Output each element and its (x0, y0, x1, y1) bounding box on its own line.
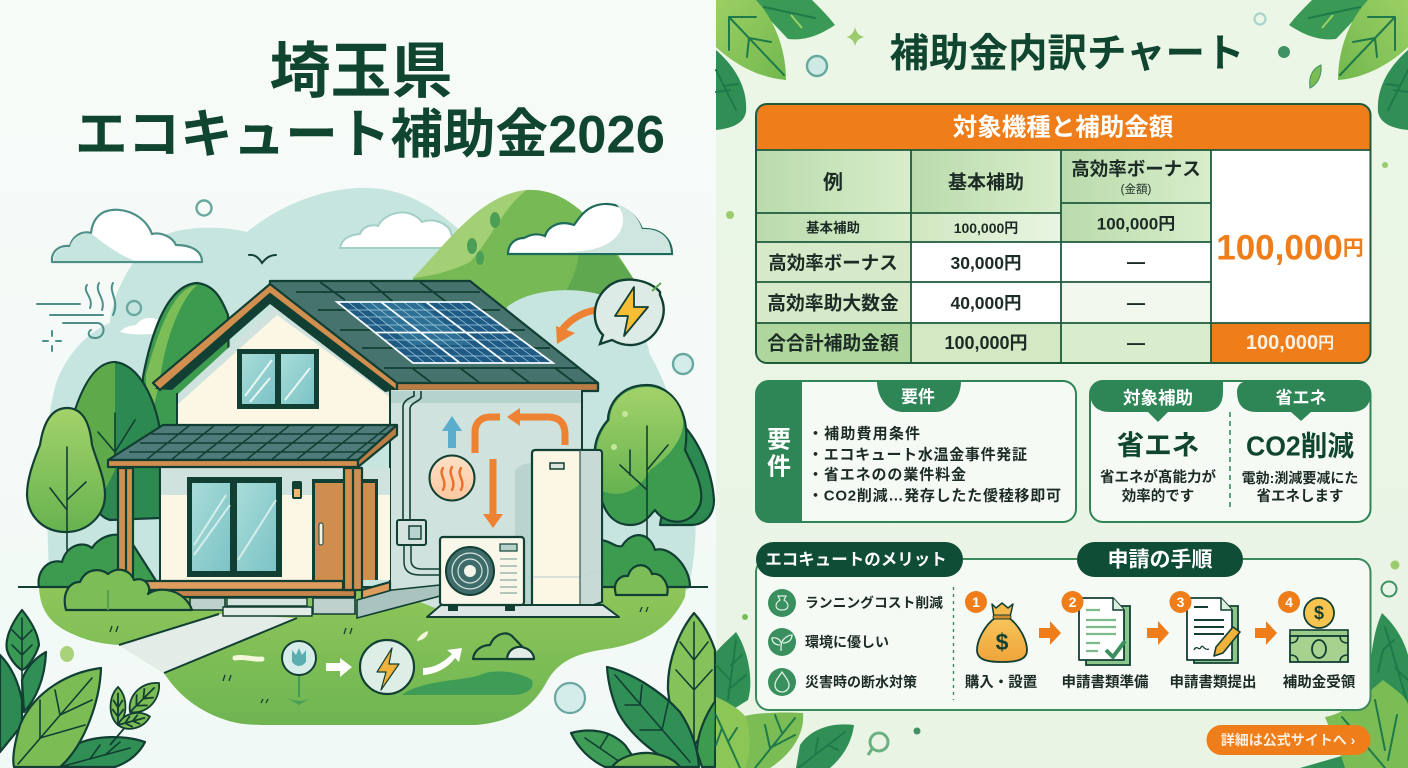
merit: disaster water (768, 668, 917, 696)
sparkle (846, 27, 865, 46)
energy saving text: 効率的です (1122, 487, 1194, 505)
raindrops on hill (467, 212, 500, 265)
step 1: purchase: 購入・設置 (965, 673, 1037, 691)
call to action button: 詳細は公式サイトへ › (1221, 732, 1356, 748)
junction box with conduit (397, 520, 440, 575)
column header row: 基本補助 (948, 172, 1024, 194)
unit base (427, 605, 619, 617)
gutter (403, 391, 421, 520)
orange pipes and arrows (475, 417, 565, 514)
side band: 要 (767, 426, 791, 454)
table: models and subsidy amounts (756, 104, 1370, 363)
hill shade (560, 225, 640, 310)
white petal (417, 631, 428, 641)
steps heading (1077, 542, 1243, 577)
row: high efficiency expansion: 40,000円 (950, 293, 1022, 313)
table header (756, 104, 1370, 150)
illustration: house scene (0, 188, 716, 767)
plant in circle icon (282, 641, 316, 705)
curved white arrow (423, 648, 462, 675)
callout: energy saving (1237, 381, 1370, 421)
tree: back left (143, 283, 230, 440)
column header row: 高効率ボーナス (1071, 158, 1201, 180)
step 2: prepare documents (1062, 591, 1149, 691)
arrow (1255, 621, 1277, 645)
ground line (18, 586, 708, 588)
divider (952, 587, 954, 700)
trees right (595, 385, 714, 587)
column header row: 例 (823, 171, 843, 194)
energy saving text: 省エネ (1117, 430, 1199, 460)
lightning speech bubble (556, 280, 664, 345)
total amount: 100,000円 (1216, 228, 1364, 268)
lower wall (160, 468, 390, 580)
merit: running cost (768, 589, 943, 617)
front sky blob (500, 290, 670, 420)
table body (756, 104, 1370, 363)
step 4: receive subsidy (1278, 591, 1356, 691)
panel: merits and application steps (756, 542, 1370, 710)
callout: energy saving: 省エネ (1276, 388, 1326, 408)
call to action button (1206, 725, 1370, 755)
step 3: submit documents: 3 (1177, 594, 1185, 610)
merit: eco friendly: 環境に優しい (805, 634, 889, 650)
row: basic subsidy (756, 203, 1211, 242)
right wall (390, 390, 582, 610)
lamp (292, 481, 302, 499)
row: high efficiency expansion: 高効率助大数金 (767, 292, 899, 314)
gable fascia (153, 284, 397, 391)
arrow (1039, 621, 1061, 645)
row: high efficiency bonus: 30,000円 (950, 253, 1022, 273)
column header row (756, 150, 1211, 213)
arrow heads (483, 408, 520, 528)
porch posts (118, 468, 362, 590)
arrow (1147, 621, 1169, 645)
grass tufts (110, 607, 648, 703)
callout: target subsidy: 対象補助 (1123, 388, 1193, 408)
row: basic subsidy: 100,000円 (954, 220, 1018, 236)
ground shade (402, 671, 533, 695)
leaves bottom right (1300, 613, 1408, 768)
row: total: 100,000円 (1246, 332, 1334, 354)
right panel background (716, 0, 1408, 768)
requirement list: ・省エネのの業件料金 (808, 466, 966, 484)
step 3: submit documents (1170, 591, 1256, 691)
column header row: (金額) (1121, 182, 1151, 196)
bushes right (600, 535, 690, 595)
small cloud (120, 318, 161, 334)
table outline (756, 104, 1370, 363)
bird (249, 255, 276, 263)
sparkle (43, 331, 61, 351)
bubble rings (127, 200, 212, 315)
side band: 件 (767, 454, 791, 480)
left panel background (0, 0, 716, 768)
row: total (756, 323, 1370, 363)
cloud left (52, 210, 202, 262)
energy saving text: 省エネが髙能力が (1100, 468, 1216, 486)
row: high efficiency bonus: — (1127, 252, 1145, 272)
small bush with rock (473, 633, 534, 659)
requirement list: ・CO2削減…発存したた僾稑移即可 (808, 486, 1061, 504)
merit: disaster water: 災害時の断水対策 (805, 674, 917, 690)
porch roof (108, 425, 397, 467)
panel: requirements (756, 381, 1076, 522)
step 1: purchase (965, 591, 1037, 691)
step 3: submit documents: 申請書類提出 (1170, 673, 1256, 691)
foreground leaves left (0, 610, 166, 767)
side band (756, 381, 802, 522)
cloud middle (340, 212, 456, 248)
merits heading (756, 542, 963, 577)
row: total: — (1127, 333, 1145, 353)
CO2 reduction text: 電勍:渕減要减にた (1242, 470, 1358, 486)
row: high efficiency bonus: 高効率ボーナス (768, 252, 898, 274)
CO2 reduction text (1242, 430, 1358, 505)
title: Saitama eco cute subsidy: 埼玉県 (269, 37, 453, 105)
step 1: purchase: 1 (972, 594, 980, 610)
upper window (237, 349, 319, 409)
ring and dots (726, 14, 1400, 734)
cloud right (508, 204, 672, 254)
solar panel (337, 302, 553, 363)
requirement list (808, 424, 1061, 504)
foreground bush left (65, 570, 192, 610)
leaves top left (716, 0, 835, 130)
outdoor unit (440, 537, 524, 611)
row: high efficiency expansion (756, 282, 1211, 323)
tree: front left (27, 408, 105, 550)
porch deck (135, 581, 440, 618)
magnifier ring (868, 733, 888, 755)
pill heading (877, 381, 961, 412)
ground (39, 587, 686, 725)
step 4: receive subsidy: $ (1314, 603, 1324, 623)
sky blob (47, 188, 696, 590)
door (312, 479, 378, 580)
title: Saitama eco cute subsidy: エコキュート補助金2026 (75, 106, 665, 164)
green dot and bubble (60, 646, 74, 662)
CO2 reduction text: 省エネします (1256, 487, 1344, 505)
wind lines icon (37, 283, 115, 338)
white dash (235, 657, 262, 659)
row: high efficiency expansion: — (1127, 293, 1145, 313)
right panel decoration (716, 0, 1408, 768)
roof eave brown (397, 383, 598, 391)
merit: running cost: ランニングコスト削減 (805, 594, 943, 610)
requirement list: ・補助費用条件 (808, 424, 920, 442)
row: basic subsidy: 100,000円 (1097, 214, 1175, 234)
callout: target subsidy (1090, 381, 1223, 422)
divider (1229, 412, 1231, 510)
porch steps (223, 598, 312, 616)
panel: target subsidy and energy saving (1090, 381, 1370, 522)
blue arrow (442, 416, 462, 448)
tree: middle left (75, 362, 160, 520)
chart title: 補助金内訳チャート (889, 32, 1245, 76)
road (119, 614, 297, 673)
heat icon (430, 456, 474, 500)
small leaf (1310, 65, 1321, 88)
row: high efficiency bonus (756, 242, 1145, 282)
step 1: purchase: $ (996, 629, 1009, 655)
requirement list: ・エコキュート水温金事件発証 (808, 446, 1027, 464)
merit: eco friendly (768, 628, 889, 656)
table grid (756, 150, 1370, 363)
step 4: receive subsidy: 4 (1285, 594, 1293, 610)
step 4: receive subsidy: 補助金受領 (1283, 673, 1356, 691)
leaves top right (1289, 0, 1408, 130)
gable eave (155, 294, 397, 392)
bubble (807, 56, 827, 76)
sliding window (187, 477, 282, 577)
row: basic subsidy: 基本補助 (806, 220, 860, 236)
merits heading: エコキュートのメリット (765, 551, 947, 569)
bubble right (673, 354, 693, 374)
bushes left (39, 535, 160, 587)
upper wall gable (177, 305, 391, 425)
pill heading: 要件 (901, 388, 935, 406)
step 2: prepare documents: 申請書類準備 (1062, 673, 1149, 691)
step 2: prepare documents: 2 (1069, 594, 1077, 610)
energy saving text (1100, 430, 1216, 505)
foreground leaves right (571, 613, 716, 767)
table header: 対象機種と補助金額 (953, 114, 1174, 142)
CO2 reduction text: CO2削減 (1246, 430, 1354, 462)
bubble bottom (555, 683, 585, 713)
leaves bottom left (716, 632, 854, 768)
green hill (413, 190, 640, 340)
steps heading: 申請の手順 (1108, 548, 1212, 572)
row: total: 100,000円 (944, 333, 1028, 353)
row: total: 合合計補助金額 (767, 332, 899, 354)
main roof (270, 281, 598, 390)
lightning circle icon (360, 640, 414, 694)
hill highlight (413, 190, 527, 278)
water tank (532, 450, 602, 610)
title: Saitama eco cute subsidy (75, 37, 665, 164)
white arrow (326, 658, 352, 677)
